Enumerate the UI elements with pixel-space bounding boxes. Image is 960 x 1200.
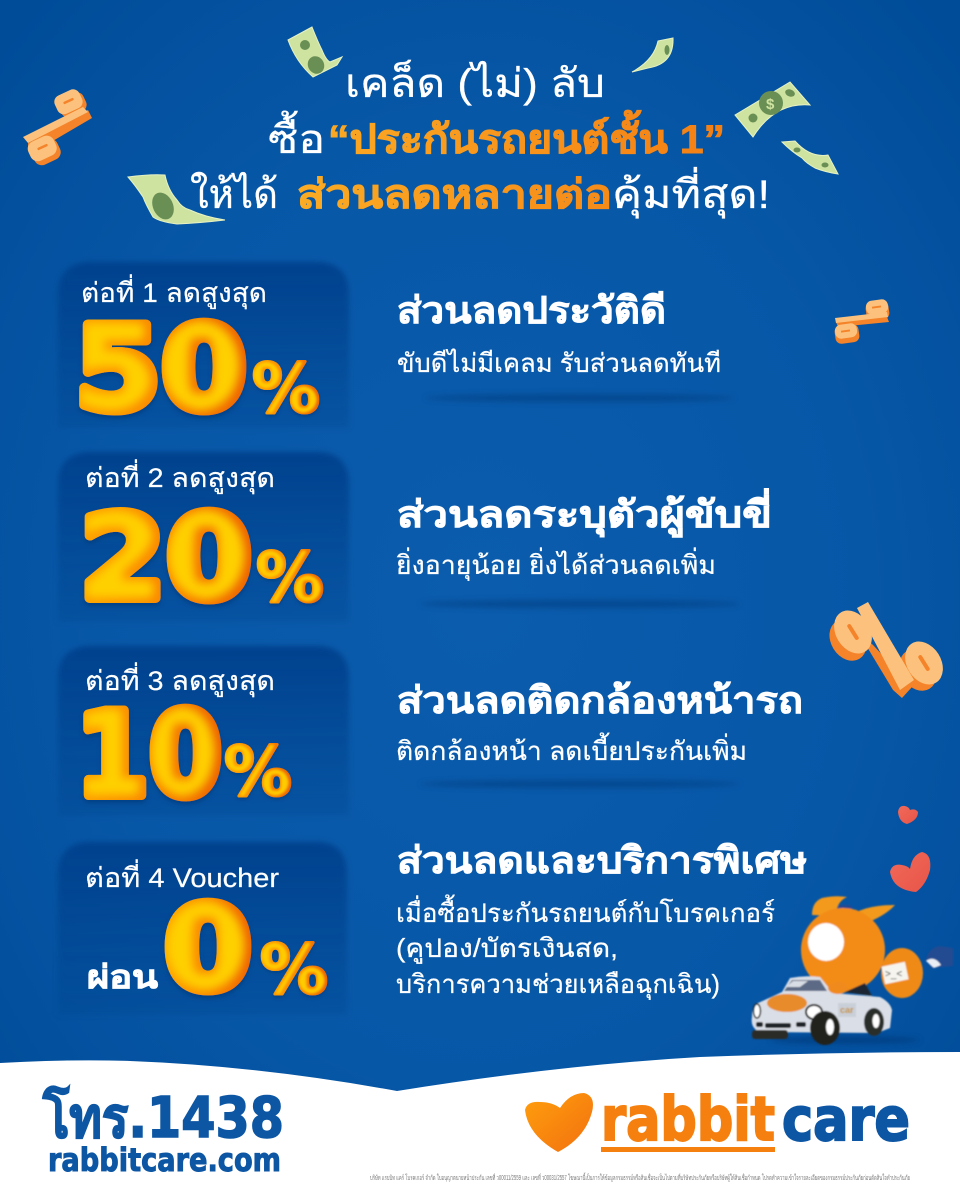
icon: money bill right small xyxy=(782,141,838,174)
footer: phone and website xyxy=(42,1085,284,1179)
figure: 50% xyxy=(75,302,320,437)
icon: percent right large xyxy=(822,602,951,698)
panel: discount 3 xyxy=(58,646,349,816)
item 1 text: ขับดีไม่มีเคลม รับส่วนลดทันที xyxy=(397,348,721,378)
item 3 text: ติดกล้องหน้า ลดเบี้ยประกันเพิ่ม xyxy=(396,732,747,766)
figure: 20%: % xyxy=(256,539,324,618)
logo: rabbit care: care xyxy=(782,1085,910,1155)
title: ให้ได้ xyxy=(190,171,278,217)
figure: 0%: 0 xyxy=(164,882,252,1017)
figure: 10%: % xyxy=(224,733,292,812)
figure: 0%: % xyxy=(260,931,328,1010)
title xyxy=(190,59,770,219)
item 4 text: เมื่อซื้อประกันรถยนต์กับโบรคเกอร์ xyxy=(396,894,775,928)
icon: money bill top right curl xyxy=(632,38,673,72)
icon: money bill left bottom xyxy=(128,175,225,224)
item 4 text: (คูปอง/บัตรเงินสด, xyxy=(396,933,618,964)
figure: 20%: 20 xyxy=(80,491,252,626)
item 3 text xyxy=(396,680,803,788)
item 4 text: ส่วนลดและบริการพิเศษ xyxy=(397,840,807,881)
logo: rabbit care xyxy=(525,1084,910,1155)
icon: large heart xyxy=(890,852,930,892)
label: discount 1: ต่อที่ 1 ลดสูงสุด xyxy=(81,274,267,310)
title: คุ้มที่สุด! xyxy=(612,167,770,219)
item 2 text: ส่วนลดระบุตัวผู้ขับขี่ xyxy=(397,488,772,538)
footer: phone and website: rabbitcare.com xyxy=(48,1141,281,1179)
icon: percent right small xyxy=(834,299,890,345)
item 4 text xyxy=(396,840,807,1000)
logo heart xyxy=(525,1093,593,1152)
icon: money bill right large: $ xyxy=(766,96,775,113)
icon: small heart xyxy=(898,806,918,824)
label: discount 4: ต่อที่ 4 Voucher xyxy=(85,859,279,893)
footer: white wave xyxy=(0,1052,960,1200)
label: discount 2: ต่อที่ 2 ลดสูงสุด xyxy=(85,459,275,495)
figure: 10%: 10 xyxy=(76,688,222,823)
title: เคล็ด (ไม่) ลับ xyxy=(345,59,605,106)
title: ซื้อ xyxy=(268,110,325,162)
title: “ประกันรถยนต์ชั้น 1” xyxy=(328,110,725,162)
footer: phone and website: โทร.1438 xyxy=(42,1085,284,1151)
label: installment: ผ่อน xyxy=(87,959,158,995)
panel: discount 4 xyxy=(58,842,347,1015)
figure: 0% xyxy=(164,882,328,1017)
label: discount 3: ต่อที่ 3 ลดสูงสุด xyxy=(85,662,275,698)
figure: 20% xyxy=(80,491,324,626)
item 1 text xyxy=(397,290,735,402)
item 4 text: บริการความช่วยเหลือฉุกเฉิน) xyxy=(396,969,720,1000)
illustration: rabbit mascot and car xyxy=(752,896,953,1045)
illustration: rabbit mascot and car: >_< xyxy=(885,969,902,980)
figure: 50%: % xyxy=(252,350,320,429)
panel: discount 1 xyxy=(58,262,349,428)
panel: discount 2 xyxy=(58,452,349,622)
icon: percent top left xyxy=(23,87,92,168)
figure: 50%: 50 xyxy=(75,302,247,437)
illustration: rabbit mascot and car: car xyxy=(840,1005,854,1015)
item 1 text: ส่วนลดประวัติดี xyxy=(397,290,666,331)
icon: money bill top left xyxy=(288,27,342,77)
item 2 text xyxy=(396,488,772,608)
title: ส่วนลดหลายต่อ xyxy=(297,173,612,217)
icon: money bill right large xyxy=(735,82,810,137)
item 2 text: ยิ่งอายุน้อย ยิ่งได้ส่วนลดเพิ่ม xyxy=(396,547,716,581)
item 3 text: ส่วนลดติดกล้องหน้ารถ xyxy=(397,680,803,721)
logo word: rabbit xyxy=(601,1084,775,1155)
